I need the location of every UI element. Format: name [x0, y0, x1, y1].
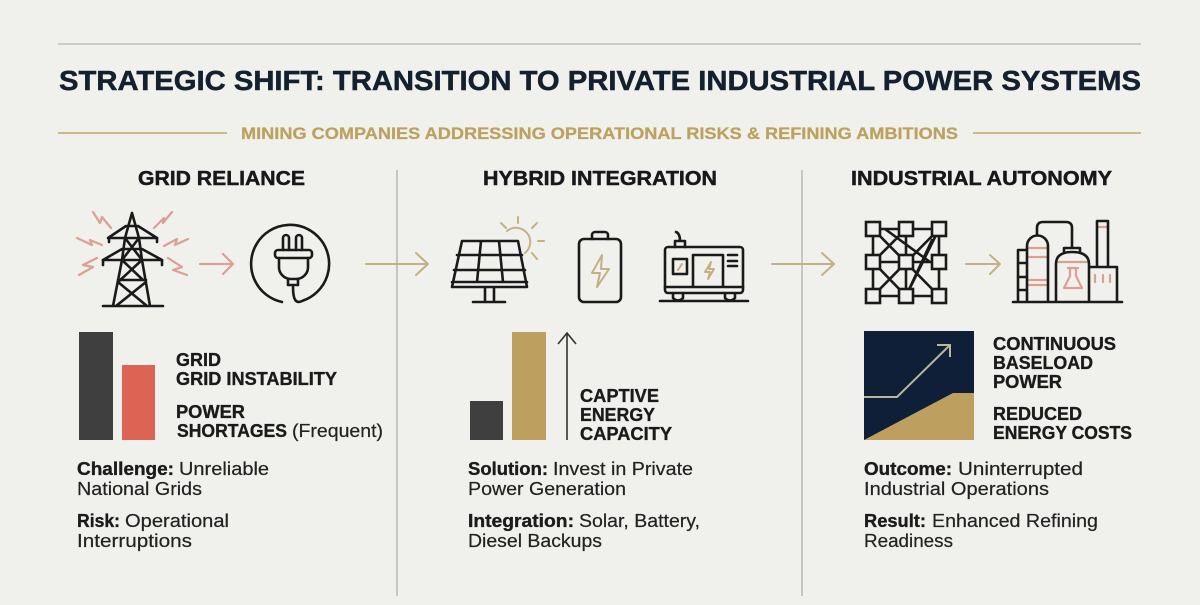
chart labels: POWER	[176, 402, 245, 422]
text block: solution and integration: Solar, Battery,	[579, 511, 700, 531]
text block: outcome and result	[864, 459, 1098, 551]
arrow: network to refinery	[966, 255, 1000, 274]
arrow: tower to plug	[200, 254, 233, 274]
arrow: hybrid to autonomy	[772, 253, 834, 275]
chart labels: GRID INSTABILITY	[176, 369, 337, 389]
chart labels: BASELOAD	[993, 353, 1093, 373]
bar chart: captive capacity	[470, 332, 576, 440]
text block: challenge and risk	[77, 459, 269, 551]
chart labels: CONTINUOUS	[993, 334, 1116, 354]
text block: challenge and risk: Unreliable	[179, 459, 269, 479]
icon: battery	[579, 232, 621, 302]
chart labels: GRID	[176, 350, 221, 370]
chart label: captive energy capacity: ENERGY	[580, 405, 655, 425]
text block: outcome and result: Enhanced Refining	[932, 511, 1098, 531]
text block: solution and integration: Integration:	[468, 511, 574, 531]
text block: solution and integration: Solution:	[468, 459, 548, 479]
chart labels: ENERGY COSTS	[993, 423, 1132, 443]
text block: solution and integration: Invest in Private	[553, 459, 693, 479]
title: STRATEGIC SHIFT: TRANSITION TO PRIVATE INDUSTRIAL POWER SYSTEMS	[59, 65, 1141, 96]
icon: plug	[251, 225, 329, 302]
arrow: grid to hybrid	[366, 253, 428, 275]
chart label: captive energy capacity: CAPTIVE	[580, 386, 659, 406]
chart label: captive energy capacity	[580, 386, 672, 444]
text block: outcome and result: Outcome:	[864, 459, 952, 479]
text block: outcome and result: Readiness	[864, 531, 953, 551]
panel: hybrid integration	[452, 168, 748, 551]
text block: solution and integration: Diesel Backups	[468, 531, 602, 551]
text block: solution and integration	[468, 459, 700, 551]
chart labels: REDUCED	[993, 404, 1082, 424]
icon: diesel generator	[660, 232, 748, 301]
panel: grid reliance	[77, 168, 383, 551]
chart labels	[993, 334, 1132, 443]
heading: hybrid integration: HYBRID INTEGRATION	[483, 168, 717, 190]
chart labels	[176, 350, 383, 441]
subtitle: MINING COMPANIES ADDRESSING OPERATIONAL RISKS & REFINING AMBITIONS	[241, 124, 958, 143]
chart labels: SHORTAGES	[177, 421, 287, 441]
text block: challenge and risk: National Grids	[77, 479, 202, 499]
text block: outcome and result: Industrial Operations	[864, 479, 1049, 499]
chart labels: POWER	[993, 372, 1062, 392]
chart: baseload trend	[864, 331, 974, 440]
text block: outcome and result: Result:	[864, 511, 926, 531]
text block: challenge and risk: Challenge:	[77, 459, 174, 479]
chart label: captive energy capacity: CAPACITY	[580, 424, 672, 444]
chart labels: (Frequent)	[292, 421, 383, 441]
icon: network grid	[866, 222, 946, 303]
icon: transmission tower with sparks	[77, 212, 188, 306]
text block: challenge and risk: Operational	[125, 511, 229, 531]
text block: challenge and risk: Risk:	[77, 511, 120, 531]
heading: grid reliance: GRID RELIANCE	[138, 168, 305, 190]
panel: industrial autonomy	[851, 168, 1132, 551]
text block: solution and integration: Power Generation	[468, 479, 626, 499]
icon: refinery	[1013, 221, 1122, 302]
text block: outcome and result: Uninterrupted	[958, 459, 1083, 479]
text block: challenge and risk: Interruptions	[77, 531, 192, 551]
icon: solar panel and sun	[452, 217, 544, 302]
bar chart: grid instability vs shortages	[79, 332, 155, 440]
heading: industrial autonomy: INDUSTRIAL AUTONOMY	[851, 168, 1113, 190]
